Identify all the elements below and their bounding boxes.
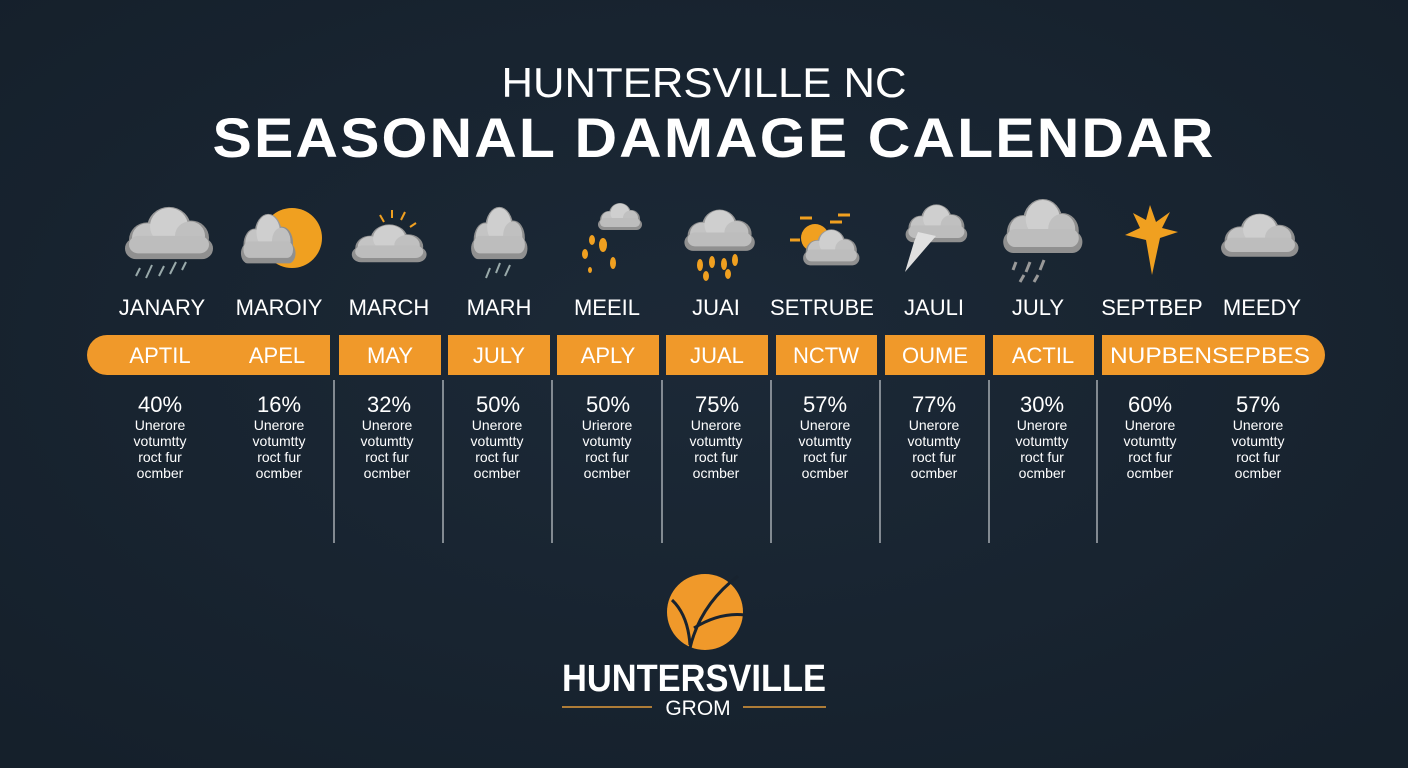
percentages and descriptions: Urierore — [582, 417, 632, 433]
percentages and descriptions: ocmber — [802, 465, 849, 481]
bar labels: JULY — [473, 343, 525, 368]
percentages and descriptions: Unerore — [691, 417, 741, 433]
icon: lightning cloud — [905, 204, 967, 272]
logo text: HUNTERSVILLE — [562, 658, 826, 700]
percentages and descriptions: 16% — [257, 392, 301, 417]
percentages and descriptions: votumtty — [361, 433, 413, 449]
percentages and descriptions: roct fur — [365, 449, 409, 465]
month labels: MARH — [467, 295, 531, 320]
percentages and descriptions: 50% — [586, 392, 630, 417]
percentages and descriptions: votumtty — [134, 433, 186, 449]
percentages and descriptions: ocmber — [1127, 465, 1174, 481]
month labels: MEEDY — [1223, 295, 1301, 320]
icon: sun cloud — [241, 208, 322, 268]
bar labels: NUPBENSEPBES — [1110, 343, 1310, 368]
percentages and descriptions: Unerore — [135, 417, 185, 433]
icon: sun with cloud — [790, 215, 859, 265]
bar labels: APTIL — [129, 343, 191, 368]
percentages and descriptions: Unerore — [362, 417, 412, 433]
percentages and descriptions: 57% — [1236, 392, 1280, 417]
percentages and descriptions: 30% — [1020, 392, 1064, 417]
percentages and descriptions: Unerore — [472, 417, 522, 433]
percentages and descriptions: roct fur — [694, 449, 738, 465]
percentages and descriptions: votumtty — [471, 433, 523, 449]
percentages and descriptions: votumtty — [1016, 433, 1068, 449]
percentages and descriptions: 50% — [476, 392, 520, 417]
percentages and descriptions: votumtty — [1232, 433, 1284, 449]
percentages and descriptions: roct fur — [475, 449, 519, 465]
percentages and descriptions: roct fur — [1236, 449, 1280, 465]
percentages and descriptions: Unerore — [1125, 417, 1175, 433]
percentages and descriptions: ocmber — [256, 465, 303, 481]
logo — [562, 574, 826, 720]
percentages and descriptions: votumtty — [253, 433, 305, 449]
month labels: JAULI — [904, 295, 964, 320]
title: HUNTERSVILLE NC — [502, 59, 906, 106]
icon: rain cloud 1 — [125, 207, 213, 278]
percentages and descriptions: ocmber — [364, 465, 411, 481]
percentages and descriptions: votumtty — [908, 433, 960, 449]
month labels: MEEIL — [574, 295, 640, 320]
percentages and descriptions: votumtty — [690, 433, 742, 449]
month labels: JANARY — [119, 295, 206, 320]
percentages and descriptions: votumtty — [799, 433, 851, 449]
percentages and descriptions: roct fur — [1020, 449, 1064, 465]
icon: leaf emblem — [667, 574, 745, 650]
icon: sun behind cloud — [352, 210, 427, 262]
percentages and descriptions: ocmber — [584, 465, 631, 481]
percentages and descriptions: roct fur — [912, 449, 956, 465]
percentages and descriptions: Unerore — [254, 417, 304, 433]
icon: cloud orange rain — [684, 210, 755, 281]
percentages and descriptions: 32% — [367, 392, 411, 417]
percentages and descriptions: votumty — [582, 433, 632, 449]
percentages and descriptions: 77% — [912, 392, 956, 417]
bar labels: APLY — [581, 343, 636, 368]
bar labels — [129, 343, 1310, 368]
percentages and descriptions: ocmber — [1019, 465, 1066, 481]
percentages and descriptions: 60% — [1128, 392, 1172, 417]
percentages and descriptions: 57% — [803, 392, 847, 417]
bar labels: JUAL — [690, 343, 744, 368]
bar labels: MAY — [367, 343, 413, 368]
percentages and descriptions: ocmber — [474, 465, 521, 481]
percentages and descriptions: roct fur — [803, 449, 847, 465]
month labels — [119, 295, 1301, 320]
percentages and descriptions — [134, 392, 1284, 481]
bar labels: NCTW — [793, 343, 859, 368]
weather icons row — [125, 199, 1298, 282]
percentages and descriptions: Unerore — [1233, 417, 1283, 433]
month labels: SETRUBE — [770, 295, 874, 320]
month labels: MARCH — [349, 295, 429, 320]
bar labels: OUME — [902, 343, 968, 368]
percentages and descriptions: Unerore — [1017, 417, 1067, 433]
bar labels: APEL — [249, 343, 305, 368]
icon: tall rain cloud — [471, 207, 527, 278]
month labels: JULY — [1012, 295, 1064, 320]
percentages and descriptions: ocmber — [911, 465, 958, 481]
percentages and descriptions: Unerore — [800, 417, 850, 433]
percentages and descriptions: votumtty — [1124, 433, 1176, 449]
logo: GROM — [665, 697, 731, 720]
percentages and descriptions: Unerore — [909, 417, 959, 433]
month labels: SEPTBEP — [1101, 295, 1203, 320]
percentages and descriptions: ocmber — [1235, 465, 1282, 481]
column dividers — [334, 380, 1097, 543]
icon: plain cloud — [1221, 214, 1298, 257]
percentages and descriptions: roct fur — [585, 449, 629, 465]
title: SEASONAL DAMAGE CALENDAR — [212, 106, 1216, 169]
month labels: MAROIY — [236, 295, 323, 320]
bar labels: ACTIL — [1012, 343, 1074, 368]
icon: orange drops — [582, 203, 642, 273]
month labels: JUAI — [692, 295, 740, 320]
icon: starburst — [1125, 205, 1178, 275]
title — [212, 59, 1216, 169]
percentages and descriptions: roct fur — [257, 449, 301, 465]
icon: big rain cloud — [1003, 199, 1082, 282]
percentages and descriptions: ocmber — [693, 465, 740, 481]
percentages and descriptions: roct fur — [1128, 449, 1172, 465]
orange month bar — [87, 335, 1325, 375]
percentages and descriptions: 75% — [695, 392, 739, 417]
percentages and descriptions: 40% — [138, 392, 182, 417]
percentages and descriptions: roct fur — [138, 449, 182, 465]
percentages and descriptions: ocmber — [137, 465, 184, 481]
